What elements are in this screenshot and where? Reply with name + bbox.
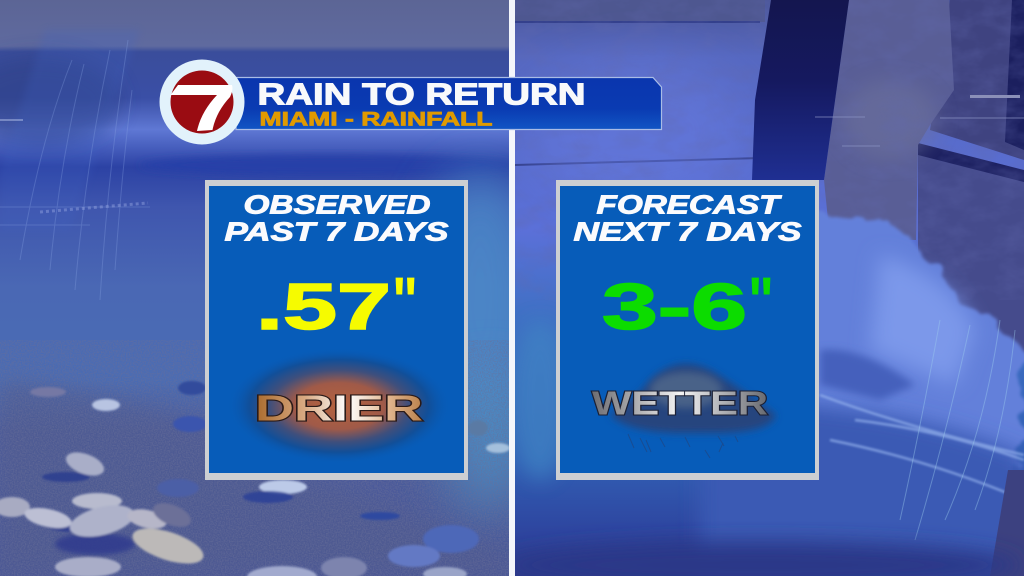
value: .57 inches: .57: [256, 270, 391, 343]
value: 3-6 inches: ": [748, 263, 774, 339]
sand grain texture: [0, 340, 509, 576]
heading: forecast next 7 days: [574, 192, 802, 246]
banner bar: [236, 78, 662, 130]
sand: [0, 379, 205, 460]
panel: headline banner: [236, 78, 662, 130]
subheading: miami rainfall: MIAMI - RAINFALL: [260, 110, 493, 130]
card frame: [205, 180, 468, 480]
panel: right storm surge background: [500, 0, 1024, 576]
value: .57 inches: [256, 263, 418, 343]
icon: drier heat glow: [227, 348, 451, 464]
icon: wetter rain cloud: WETTER: [592, 384, 768, 422]
headline: rain to return: RAIN TO RETURN: [258, 78, 586, 112]
heading: observed past 7 days: [224, 192, 448, 246]
panel: forecast next 7 days: [556, 180, 819, 480]
heading: forecast next 7 days: NEXT 7 DAYS: [574, 218, 802, 246]
panel: left beach background: [0, 0, 540, 576]
icon: drier heat glow: DRIER: [255, 388, 423, 428]
center divider: [509, 0, 515, 576]
value: .57 inches: ": [392, 263, 418, 339]
heading: forecast next 7 days: FORECAST: [596, 192, 783, 220]
wall stone texture: [515, 0, 1024, 264]
heading: observed past 7 days: PAST 7 DAYS: [224, 218, 448, 246]
value: 3-6 inches: [602, 263, 774, 343]
water splash: [800, 211, 1024, 470]
dark beam: [752, 0, 849, 180]
value: 3-6 inches: 3-6: [602, 270, 747, 343]
heading: observed past 7 days: OBSERVED: [244, 192, 430, 220]
panel: observed past 7 days: [205, 180, 468, 480]
shells: [0, 381, 510, 576]
card frame: [556, 180, 819, 480]
stone column: [824, 0, 954, 240]
icon: wetter rain cloud: [592, 364, 776, 458]
icon: channel 7 logo: [160, 60, 244, 144]
far right window: [930, 0, 1024, 160]
